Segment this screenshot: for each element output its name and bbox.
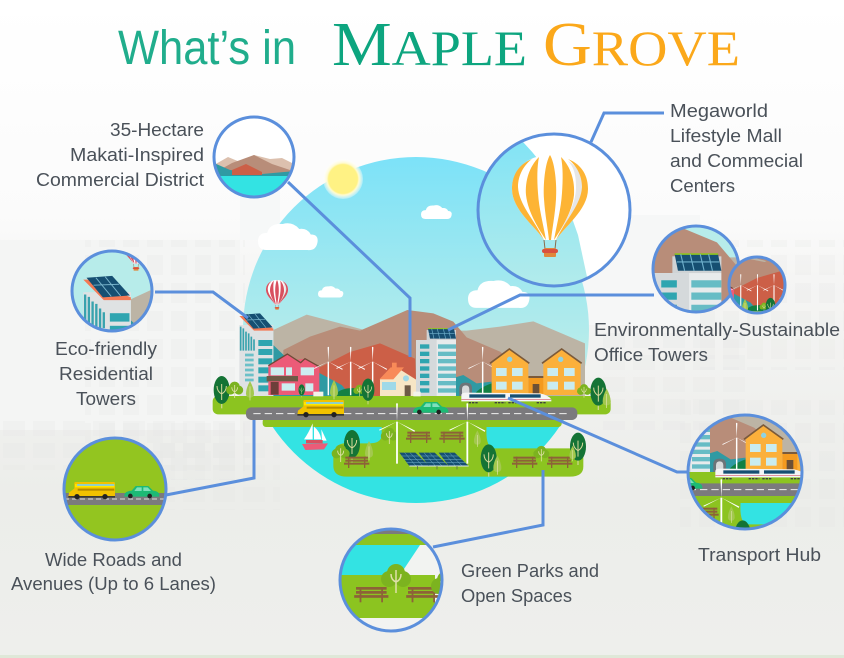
- label: parks: Green Parks and: [461, 560, 599, 581]
- label: parks: [461, 560, 599, 606]
- label: transport hub: Transport Hub: [698, 544, 821, 565]
- connector lines: [155, 113, 690, 547]
- label: residential towers: Eco-friendly: [55, 338, 158, 359]
- title: What’s in: [118, 22, 296, 75]
- label: roads: Wide Roads and: [45, 549, 182, 570]
- label: parks: Open Spaces: [461, 585, 572, 606]
- clouds: [258, 205, 529, 308]
- label: commercial district: Commercial District: [36, 169, 204, 190]
- label: commercial district: 35-Hectare: [110, 119, 204, 140]
- label: mall: and Commecial: [670, 150, 803, 171]
- title: MAPLE: [332, 11, 527, 79]
- label: residential towers: Residential: [59, 363, 153, 384]
- callout: eco-friendly tower: [70, 250, 154, 332]
- callout: commercial district: [214, 117, 296, 200]
- label: residential towers: [55, 338, 158, 409]
- callout: hot air balloon: [476, 132, 632, 288]
- label: office towers: Office Towers: [594, 344, 708, 365]
- label: roads: [11, 549, 216, 594]
- callout: wind turbines: [728, 256, 786, 314]
- label: mall: Megaworld: [670, 100, 768, 121]
- callout: roads: [60, 438, 170, 540]
- label: residential towers: Towers: [76, 388, 136, 409]
- callout: parks: [338, 528, 444, 632]
- label: mall: Centers: [670, 175, 735, 196]
- title: GROVE: [543, 11, 740, 79]
- sailboat: [302, 423, 328, 450]
- callout: office tower: [652, 224, 740, 314]
- label: mall: Lifestyle Mall: [670, 125, 782, 146]
- label: roads: Avenues (Up to 6 Lanes): [11, 573, 216, 594]
- label: office towers: [594, 319, 840, 365]
- sun: [323, 159, 363, 199]
- title: [118, 11, 740, 79]
- label: commercial district: [36, 119, 204, 190]
- central illustration circle: [213, 157, 611, 520]
- callout: transport hub: [686, 414, 804, 530]
- label: commercial district: Makati-Inspired: [70, 144, 204, 165]
- label: office towers: Environmentally-Sustainable: [594, 319, 840, 340]
- small balloon: [266, 280, 288, 310]
- label: mall: [670, 100, 803, 196]
